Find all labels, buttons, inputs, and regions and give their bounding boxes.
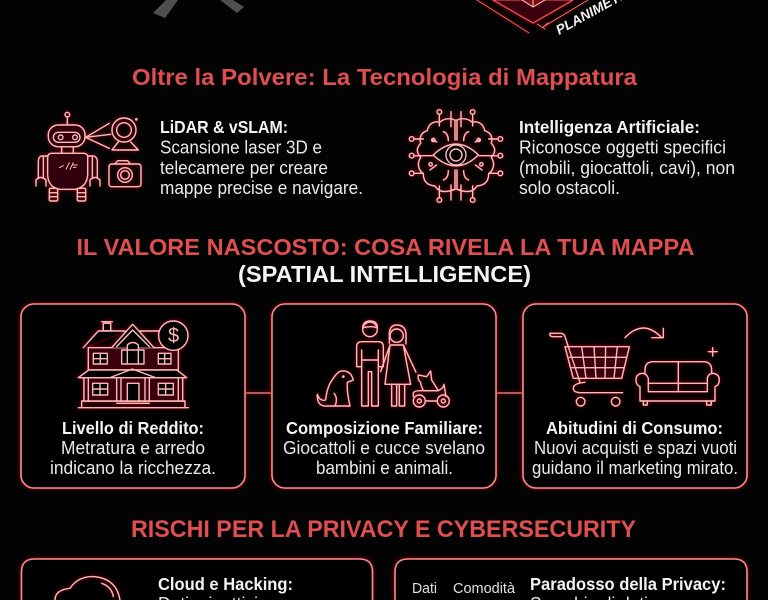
text: family description: bambini e animali. (316, 458, 453, 478)
text: LiDAR description: Scansione laser 3D e (160, 138, 322, 158)
text: AI description (519, 117, 735, 198)
text: income description (50, 418, 216, 478)
text: consumer description: Abitudini di Consumo: (546, 418, 723, 438)
text: income description: Metratura e arredo (61, 438, 205, 458)
panel: cloud and hacking (22, 559, 372, 600)
text: LiDAR description (160, 117, 363, 198)
subheading: spatial intelligence: (SPATIAL INTELLIGENCE) (238, 261, 531, 287)
icon: shopping cart, arrow and sofa (550, 328, 719, 406)
text: scale labels (412, 581, 516, 597)
connector lines between cards (245, 392, 523, 394)
text: scale labels: Dati (412, 581, 437, 597)
text: paradox description: Paradosso della Privacy: (530, 574, 726, 594)
icon: floor plan diamond (cropped top illustration) (477, 0, 588, 33)
icon: house with dollar (78, 321, 188, 408)
text: consumer description: Nuovi acquisti e spazi vuoti (534, 438, 737, 458)
text: LiDAR description: mappe precise e navigare. (160, 178, 363, 198)
text: AI description: solo ostacoli. (519, 178, 620, 198)
text: income description: Livello di Reddito: (62, 418, 204, 438)
heading: hidden value: IL VALORE NASCOSTO: COSA RIVELA LA TUA MAPPA (76, 234, 695, 260)
panel: income level (21, 304, 245, 488)
text: family description (283, 418, 485, 478)
text: AI description: Intelligenza Artificiale: (519, 117, 700, 137)
text: family description: Composizione Familiare: (286, 418, 483, 438)
text: AI description: Riconosce oggetti specifici (519, 138, 726, 158)
icon: dollar sign: $ (168, 325, 179, 347)
text: family description: Giocattoli e cucce svelano (283, 438, 485, 458)
text: LiDAR description: LiDAR & vSLAM: (160, 117, 288, 137)
panel: privacy paradox (395, 559, 747, 600)
heading: technology: Oltre la Polvere: La Tecnologia di Mappatura (132, 64, 637, 90)
icon: robot with sensors (36, 112, 141, 201)
heading: risks: RISCHI PER LA PRIVACY E CYBERSECURITY (131, 516, 636, 543)
panel: family composition (272, 304, 496, 488)
text: scale labels: Comodità (453, 581, 516, 597)
text: consumer description: guidano il marketing mirato. (532, 458, 738, 478)
panel: LiDAR and vSLAM (36, 112, 363, 201)
text: consumer description (532, 418, 738, 478)
icon: cloud (55, 577, 120, 600)
panel: consumer habits (523, 304, 747, 488)
icon: family with dog and toy car (317, 321, 449, 407)
text: income description: indicano la ricchezza. (50, 458, 216, 478)
panel: artificial intelligence (409, 110, 735, 202)
icon: robot vacuum legs (cropped top illustration) (153, 0, 244, 18)
text: cloud description: Cloud e Hacking: (158, 574, 293, 594)
icon: brain with eye (409, 110, 503, 202)
text: AI description: (mobili, giocattoli, cavi), non (519, 158, 735, 178)
text: LiDAR description: telecamere per creare (160, 158, 328, 178)
